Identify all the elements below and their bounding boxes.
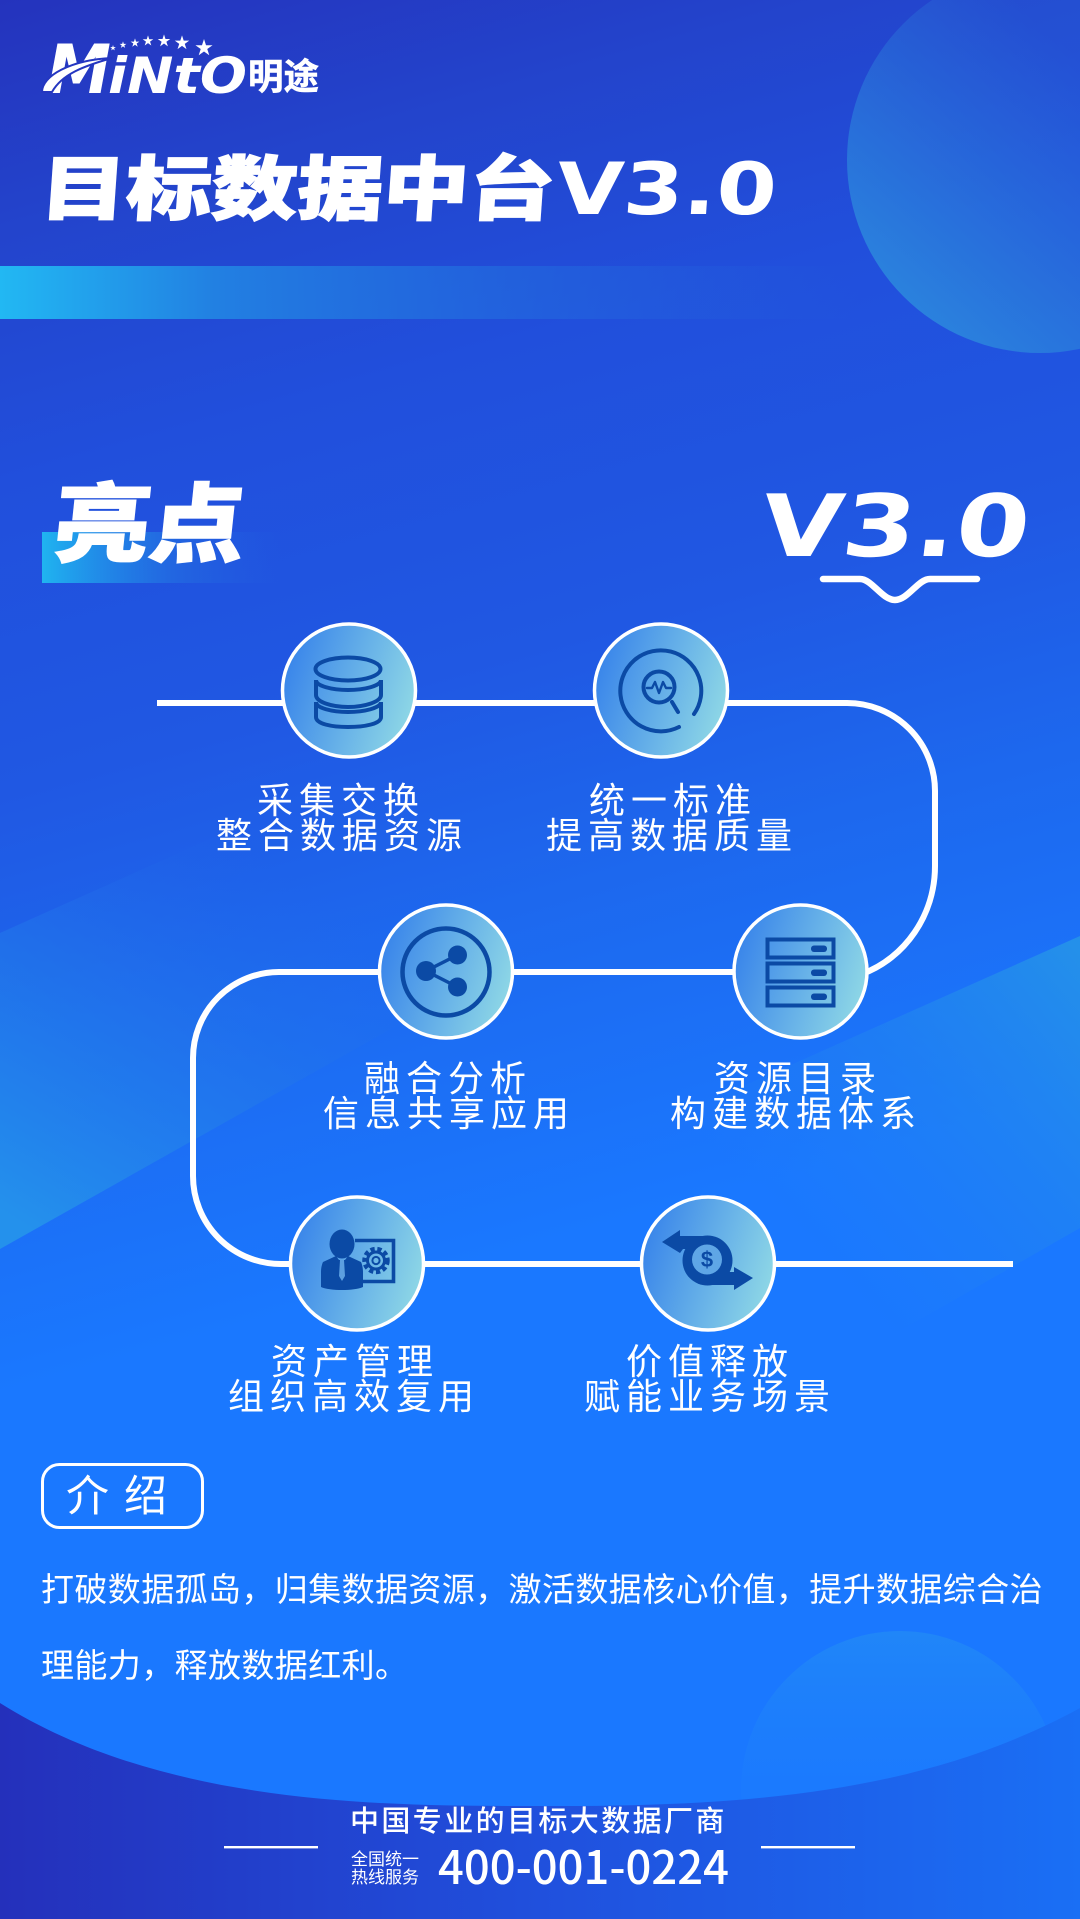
intro tag xyxy=(42,1462,202,1528)
label xyxy=(228,1333,480,1420)
intro tag frame xyxy=(42,1464,202,1528)
label: 组织高效复用 xyxy=(228,1368,480,1420)
version badge xyxy=(755,477,1036,600)
node circle xyxy=(282,624,416,757)
node 3: fusion and analysis xyxy=(323,905,575,1137)
label: 价值释放 xyxy=(626,1333,794,1385)
label: 赋能业务场景 xyxy=(584,1368,836,1420)
intro paragraph: 理能力，释放数据红利。 xyxy=(41,1639,408,1687)
logo xyxy=(42,31,319,110)
label: 融合分析 xyxy=(364,1050,532,1102)
label xyxy=(670,1050,922,1137)
hotline number: 400-001-0224 xyxy=(438,1832,729,1898)
footer slogan: 中国专业的目标大数据厂商 xyxy=(350,1798,727,1840)
label: 整合数据资源 xyxy=(216,807,468,859)
logo swoosh xyxy=(42,58,112,92)
version underline notch xyxy=(823,579,977,600)
label: 构建数据体系 xyxy=(670,1085,922,1137)
background diagonal band left xyxy=(0,745,620,1249)
icon: server rack xyxy=(768,940,834,1006)
label: 采集交换 xyxy=(257,772,425,824)
node circle xyxy=(380,905,512,1038)
footer rule left xyxy=(224,1846,318,1848)
node 4: resource catalog xyxy=(670,905,922,1137)
section tag background xyxy=(42,532,282,583)
footer rule right xyxy=(761,1846,855,1848)
icon: person with vault xyxy=(321,1230,394,1290)
label: 资源目录 xyxy=(714,1050,882,1102)
node circle xyxy=(290,1197,424,1330)
node circle xyxy=(594,624,728,757)
logo stars xyxy=(110,34,213,55)
flow line lower xyxy=(193,972,1013,1264)
title underline strip xyxy=(0,266,860,319)
title: 目标数据中台 xyxy=(38,134,559,235)
title: V3.0 xyxy=(554,147,780,231)
label: 信息共享应用 xyxy=(323,1085,575,1137)
top right circle xyxy=(847,0,1080,353)
flow line upper xyxy=(157,703,935,974)
node 5: asset management xyxy=(228,1197,480,1420)
icon: money flow arrows: $ xyxy=(701,1247,713,1272)
icon: money flow arrows xyxy=(662,1230,753,1290)
icon: share xyxy=(402,928,490,1016)
hotline caption: 全国统一 xyxy=(351,1845,419,1870)
label xyxy=(216,772,468,859)
node circle xyxy=(642,1197,774,1330)
title xyxy=(38,134,781,235)
logo wordmark xyxy=(47,31,247,110)
node 1: collect and exchange xyxy=(216,624,468,859)
hotline caption: 热线服务 xyxy=(351,1863,419,1888)
logo wordmark: M xyxy=(47,31,111,110)
logo chinese name: 明途 xyxy=(248,48,319,100)
label xyxy=(584,1333,836,1420)
icon: database xyxy=(316,658,381,727)
node circle xyxy=(734,905,867,1038)
label: 提高数据质量 xyxy=(546,807,798,859)
bottom wave xyxy=(0,1703,1080,1919)
label: 统一标准 xyxy=(589,772,757,824)
heading: highlights: 亮点 xyxy=(49,455,252,580)
label: 资产管理 xyxy=(271,1333,439,1385)
bottom right faint circle xyxy=(741,1631,1059,1919)
label xyxy=(546,772,798,859)
intro paragraph: 打破数据孤岛，归集数据资源，激活数据核心价值，提升数据综合治 xyxy=(41,1563,1043,1611)
version text: V3.0 xyxy=(755,477,1036,577)
logo wordmark: iNtO xyxy=(108,47,247,105)
intro paragraph xyxy=(41,1563,1043,1687)
intro tag text: 介绍 xyxy=(66,1462,182,1524)
icon: magnifier pulse xyxy=(620,650,701,731)
footer xyxy=(224,1798,855,1898)
label xyxy=(323,1050,575,1137)
background diagonal band right xyxy=(600,936,1080,1480)
hotline caption xyxy=(351,1845,419,1888)
node 6: value release xyxy=(584,1197,836,1420)
node 2: unified standards xyxy=(546,624,798,859)
